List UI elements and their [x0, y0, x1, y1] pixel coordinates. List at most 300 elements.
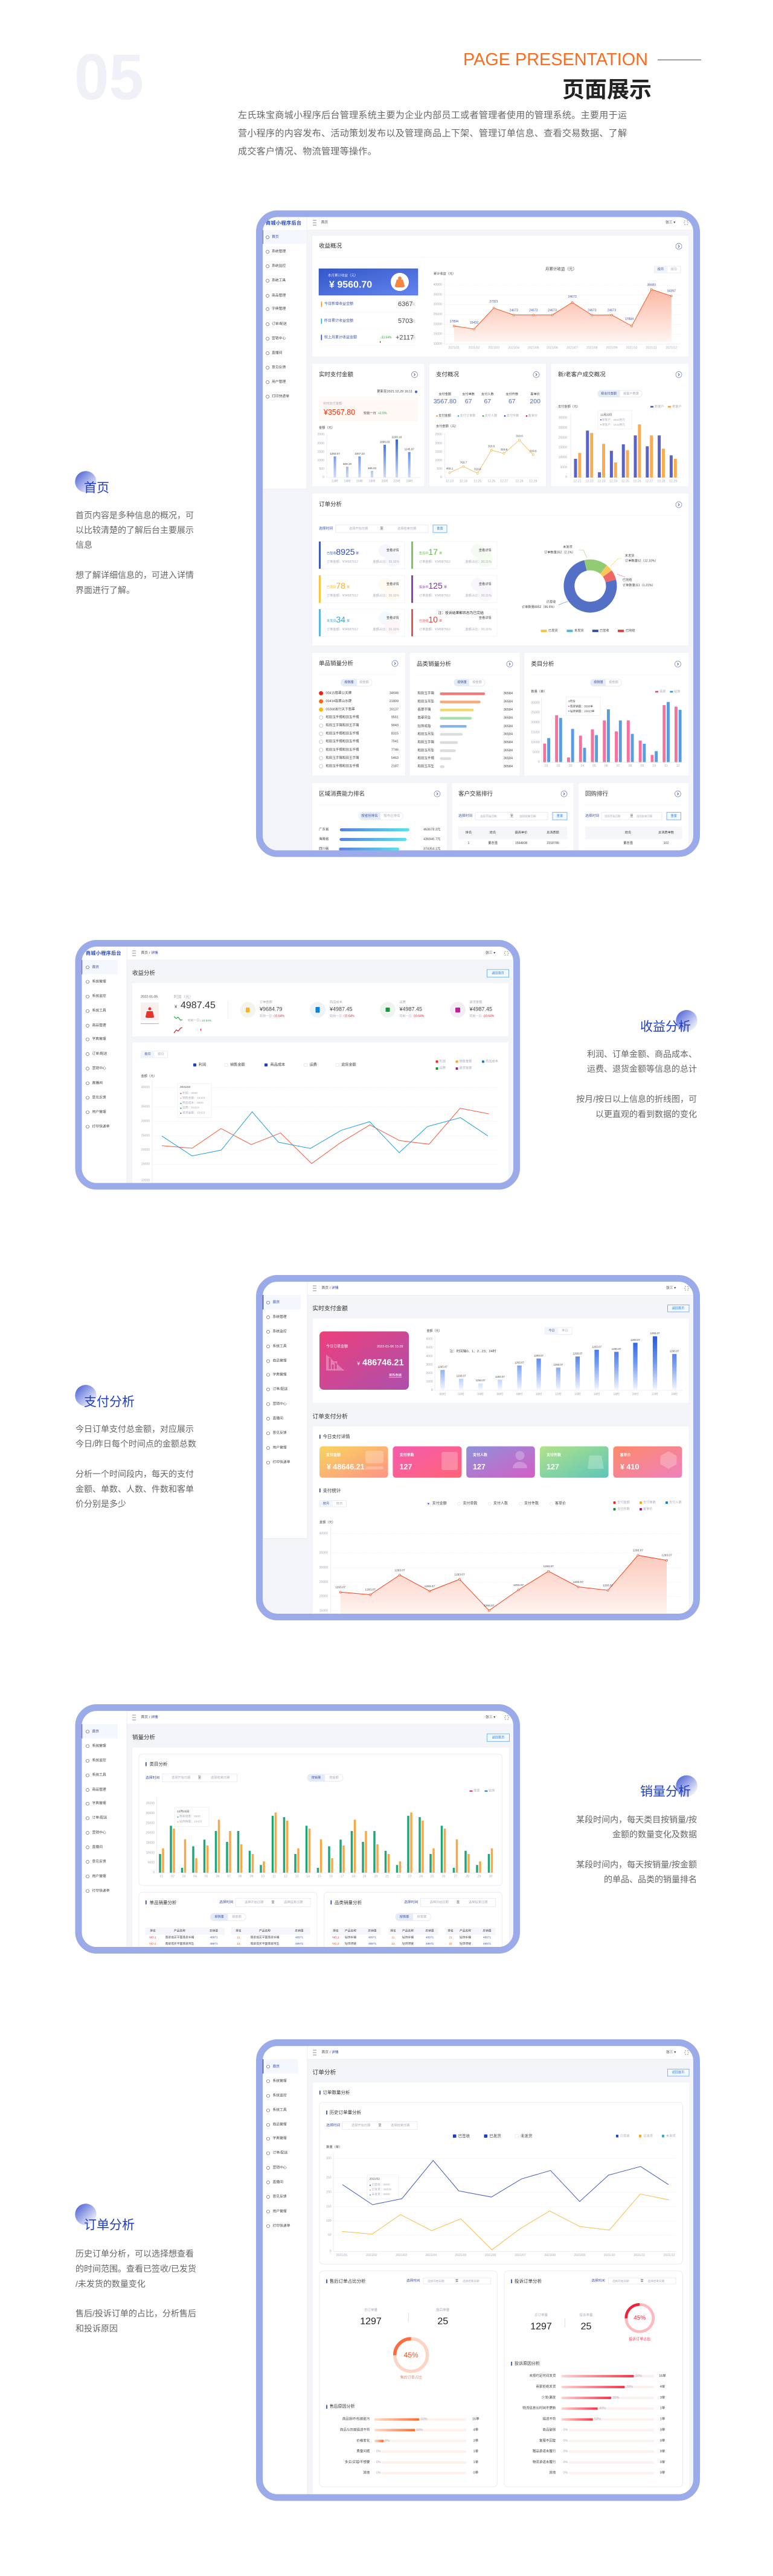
card: category sales: 36584: [504, 692, 513, 695]
box: category sales table: 按金额: [417, 1914, 427, 1919]
page title with back button: 返回首页: [492, 1735, 504, 1740]
sidebar menu: 商品管理: [273, 1358, 287, 1363]
box: single item sales table: NO.2: [149, 1942, 156, 1946]
card: category sales: 36584: [504, 717, 513, 720]
box: historical orders chart: 2021/03: [396, 2254, 407, 2257]
bar list: after-sales reasons: 44%: [416, 2428, 423, 2432]
chart tooltip: 翡翠销量：3500: [179, 1814, 200, 1818]
card: payment overview: 12.26: [487, 479, 495, 483]
box: single item sales table: 排名: [150, 1928, 156, 1933]
box: category analysis chart: 18: [351, 1875, 355, 1879]
sidebar menu: 直播间: [92, 1844, 103, 1849]
side note: 销量分析: 某段时间内，每天按销量/按金额: [576, 1859, 697, 1869]
card: new and old customers: 12.25: [621, 479, 629, 483]
card: realtime payment chart: 02时: [458, 1392, 464, 1396]
box: category analysis chart: 10: [261, 1875, 265, 1879]
line chart: monthly revenue: 2021/11: [646, 347, 657, 350]
bar list: after-sales reasons: 商品损坏/包装脏污: [342, 2417, 370, 2421]
card: payment overview: 支付金额（元）: [436, 424, 458, 429]
card: category sales: 翡翠手镯: [417, 707, 431, 712]
card: payment overview: 客单价: [530, 392, 540, 397]
box: category sales table: 总销量: [425, 1928, 434, 1933]
card: new and old customers: 按客户数量: [623, 391, 639, 395]
card: realtime payment chart: 注：时间轴0、1、2...23、24时: [449, 1349, 496, 1354]
card: single item sales: 21809: [390, 700, 399, 703]
card: payment overview: 12.29: [529, 479, 537, 483]
sidebar menu: 打印快递单: [273, 1460, 290, 1465]
line chart: monthly revenue: [434, 266, 681, 350]
card: realtime payment: ¥3567.80: [323, 408, 355, 417]
card: customer ranking: 排名: [466, 830, 472, 835]
card: payment overview: 支付单数: [462, 392, 475, 397]
card: payment overview: 200: [530, 398, 540, 405]
box: historical orders chart: 2021/07: [515, 2254, 526, 2257]
card: realtime payment chart: 06时: [497, 1392, 503, 1396]
card: realtime payment chart: 6000: [426, 1338, 433, 1341]
card: payment overview: 1000: [435, 459, 442, 462]
sidebar menu: 首页: [273, 1300, 280, 1305]
chart tooltip: 运费：16423: [182, 1105, 199, 1110]
box: category sales table: 产品名称: [345, 1928, 356, 1933]
box: category analysis chart: 08: [239, 1875, 242, 1879]
card: category analysis: 03: [569, 764, 573, 768]
card: profit summary: ¥4987.45: [469, 1006, 492, 1012]
box: historical orders chart: 50: [328, 2234, 332, 2237]
card: realtime payment chart: 1000: [426, 1380, 433, 1384]
order status stat cards: 单: [439, 551, 442, 555]
gradient kpi cards: 支付单数: [400, 1453, 414, 1457]
bar list: after-sales reasons: 质量问题: [356, 2449, 370, 2453]
line chart: monthly revenue: 24673: [588, 309, 597, 313]
card: order analysis: 选择时间: [319, 526, 333, 531]
card: realtime payment: +2.5%: [378, 412, 387, 415]
sidebar menu: 用户管理: [92, 1873, 106, 1878]
box: after-sales orders: 至: [455, 2280, 458, 2283]
bar list: complaint reasons: 物流信息长时间不更新: [522, 2406, 556, 2411]
sidebar menu: [263, 1282, 307, 1538]
card: new and old customers: 支付金额（元）: [558, 404, 580, 409]
card: category sales: 钻饰戒指: [417, 723, 431, 728]
side note: 收益分析: 利润、订单金额、商品成本、: [587, 1049, 697, 1059]
line chart: monthly revenue: 累计收益（元）: [434, 271, 455, 276]
bar list: after-sales reasons: 价格变化: [356, 2438, 370, 2443]
card: realtime payment: 1145.97: [405, 448, 414, 450]
box: category sales table: 钻饰手镯: [345, 1935, 356, 1939]
bar list: complaint reasons: 物流承诺未履行: [533, 2459, 556, 2464]
box: historical orders chart: 已签收: [620, 2133, 630, 2138]
order status stat cards: 金额占比：20.11%: [373, 593, 399, 598]
box: category sales table: 选择结束日期: [469, 1899, 487, 1904]
box: after-sales orders: 售后原因分析: [330, 2403, 355, 2409]
box: category analysis chart: 翡翠: [473, 1788, 480, 1793]
card: profit summary: ¥9684.79: [259, 1006, 283, 1012]
card: realtime payment chart: 24时: [671, 1392, 678, 1396]
sidebar menu: 商品管理: [92, 1787, 106, 1792]
sidebar menu: 字典管理: [273, 2136, 287, 2141]
line chart: monthly revenue: 24673: [509, 309, 518, 313]
box: category analysis chart: 14: [306, 1875, 310, 1879]
order status stat cards: 查看详情: [479, 581, 492, 586]
side note: 收益分析: [576, 1010, 698, 1119]
card: category analysis: 15000: [531, 730, 540, 734]
outer content card: 订单数量分析: [322, 2089, 350, 2095]
line chart: monthly revenue: 2021/06: [547, 347, 558, 350]
order status stat cards: 注：投诉结果都状态为已完结: [438, 610, 484, 615]
card: payment overview: 12.25: [473, 479, 481, 483]
card: payment overview: 319.6: [516, 435, 523, 437]
sidebar menu: 字典管理: [92, 1801, 106, 1806]
card: regional consumption ranking: 海南省: [319, 836, 329, 841]
box: category analysis chart: 27: [454, 1875, 457, 1879]
box: single item sales table: 11: [237, 1935, 240, 1939]
order status stat cards: 订单金额：¥34587612: [327, 559, 358, 564]
box: category analysis chart: 19: [363, 1875, 366, 1879]
card: realtime payment: 508.19: [343, 462, 351, 465]
box: category analysis chart: 29: [478, 1875, 481, 1879]
side note: 首页: 界面进行了解。: [75, 585, 135, 595]
sidebar menu: 商城小程序后台: [266, 220, 301, 226]
card: realtime payment chart: 金额（元）: [426, 1329, 442, 1333]
card: order payment details: 支付人数: [493, 1501, 508, 1506]
card: new and old customers: 新客户: [655, 404, 664, 409]
card: payment overview: 319.6: [501, 448, 508, 451]
bar list: complaint reasons: 未按约定时间发货: [529, 2373, 556, 2378]
chart tooltip: 已发货：16423: [372, 2187, 391, 2191]
box: category sales table: 产品名称: [460, 1928, 471, 1933]
pink total card: [319, 1331, 409, 1390]
progress ring: complaint share: 投诉订单占比: [629, 2337, 650, 2342]
side note: 销量分析: 金额的数量变化及数据: [612, 1829, 697, 1839]
line chart: monthly revenue: 25000: [434, 313, 442, 316]
bar list: after-sales reasons: 3单: [473, 2438, 479, 2443]
card: realtime payment: 金额（元）: [319, 425, 335, 430]
box: single item sales table: 按销量: [214, 1914, 224, 1919]
area line chart: 1293.07: [335, 1585, 346, 1589]
sidebar menu: 营销中心: [92, 1066, 106, 1070]
card: realtime payment: 466.43: [368, 467, 376, 470]
card: revenue overview: [312, 235, 688, 357]
card: repurchase ranking: 姓名: [625, 830, 631, 835]
box: category analysis chart: 03: [182, 1875, 185, 1879]
card: customer ranking: 1: [468, 842, 470, 845]
bar list: complaint reasons: 0%: [563, 2428, 568, 2432]
card: realtime payment chart: 00时: [440, 1392, 446, 1396]
card: repurchase ranking: 102: [664, 842, 669, 845]
card: profit line chart: [132, 1042, 508, 1187]
chart tooltip: 未发货：3500: [372, 2192, 390, 2196]
side note: 销量分析: 某段时间内，每天类目按销量/按: [576, 1815, 697, 1824]
area line chart: 1293.07: [573, 1580, 583, 1584]
card: regional consumption ranking: 463678.3元: [423, 827, 441, 831]
device frame: sales analysis: [79, 1707, 517, 1950]
line chart: monthly revenue: 17894: [625, 318, 633, 321]
card: payment overview: 12.28: [516, 479, 524, 483]
chart tooltip: [178, 1084, 211, 1117]
box: category analysis chart: 12: [284, 1875, 287, 1879]
card: category sales: 36584: [504, 700, 513, 704]
card: category sales: 和田玉吊坠: [417, 699, 434, 704]
bar list: after-sales reasons: 50%: [421, 2418, 428, 2421]
order status stat cards: 售后中: [419, 551, 429, 555]
card: profit summary: 利润（元）: [174, 994, 193, 999]
card: new and old customers: 12.29: [669, 479, 677, 483]
sidebar menu: 首页: [272, 234, 279, 239]
card: category sales: 按销量: [457, 680, 467, 685]
sidebar menu: 订单/配送: [272, 321, 287, 326]
gradient kpi cards: 客单价: [620, 1453, 631, 1457]
box: category analysis chart: 10000: [146, 1851, 155, 1855]
box: category analysis chart: 04: [193, 1875, 197, 1879]
sidebar menu: 系统监控: [272, 263, 286, 268]
bar list: complaint reasons: 3单: [660, 2395, 666, 2400]
bar list: complaint reasons: 0单: [660, 2470, 666, 2475]
card: customer ranking: 客户交易排行: [458, 790, 493, 797]
box: category sales table: 48971: [426, 1942, 434, 1946]
box: single item sales table: 总销量: [295, 1928, 304, 1933]
card: realtime payment chart: 1293.07: [553, 1363, 563, 1366]
progress ring: after-sales share: 售后订单占比: [400, 2375, 422, 2380]
card: realtime payment chart: 08时: [516, 1392, 522, 1396]
card: realtime payment: 实时支付金额：: [323, 401, 345, 406]
line chart: monthly revenue: 2021/01: [448, 347, 460, 350]
card: new and old customers: 10000: [559, 456, 567, 459]
box: historical orders chart: 2021/08: [544, 2254, 556, 2257]
card: new and old customers: 12.22: [586, 479, 594, 483]
card: realtime payment: 1000: [317, 459, 324, 462]
intro paragraph: 成交客户情况、物流管理等操作。: [238, 146, 377, 157]
revenue stat rows: [321, 301, 417, 345]
box: historical orders chart: 历史订单量分析: [330, 2109, 362, 2115]
device frame: home: [260, 214, 697, 854]
line chart: monthly revenue: 2021/07: [566, 347, 578, 350]
progress ring: complaint share: 45%: [633, 2315, 646, 2322]
top header bar: 首页 / 详情: [321, 1285, 339, 1290]
side note: 收益分析: 以更直观的看到数据的变化: [595, 1109, 697, 1119]
chart tooltip: 商品成本：3500: [182, 1101, 204, 1105]
area line chart: 1293.07: [603, 1584, 614, 1588]
chart tooltip: [598, 411, 632, 429]
box: category sales table: [324, 1892, 502, 1958]
card: regional consumption ranking: 按市区排名: [383, 813, 400, 818]
top header bar: 首页: [321, 220, 328, 225]
side note: 收益分析: 运费、退货金额等信息的总计: [587, 1064, 697, 1074]
donut chart: order status: 订单数量8952（96.6%）: [522, 604, 556, 609]
box: category analysis chart: 23: [408, 1875, 411, 1879]
box: category sales table: 选择开始日期: [430, 1899, 449, 1904]
bar list: complaint reasons: 商家拒绝发货: [536, 2384, 556, 2389]
sidebar menu: 意见反馈: [92, 1859, 106, 1864]
revenue stat rows: +2117: [396, 334, 414, 342]
bar list: complaint reasons: 10%: [635, 2374, 642, 2378]
card: realtime payment: 1007.23: [354, 452, 365, 455]
card: realtime payment: 1500: [317, 450, 324, 454]
card: payment overview: 500: [437, 467, 442, 471]
box: complaint orders: 投诉订单分析: [515, 2278, 542, 2284]
line chart: monthly revenue: 2021/09: [606, 347, 617, 350]
card: category analysis: 01: [545, 764, 548, 768]
bar list: complaint reasons: 30%: [612, 2396, 620, 2400]
box: category analysis chart: 07: [227, 1875, 231, 1879]
box: historical orders chart: 2021/10: [604, 2254, 615, 2257]
box: category sales table: 按销量: [400, 1914, 409, 1919]
box: single item sales table: 翡翠或买平面翡翠吊坠: [165, 1942, 194, 1946]
box: category analysis chart: 选择开始日期: [172, 1775, 190, 1780]
box: single item sales table: 单品销量分析: [150, 1899, 177, 1905]
card: regional consumption ranking: [312, 782, 447, 855]
box: historical orders chart: 0: [330, 2249, 332, 2253]
box: single item sales table: [139, 1892, 317, 1958]
box: after-sales orders: 1297: [360, 2316, 382, 2327]
box: after-sales orders: 售后单量: [436, 2307, 450, 2312]
card: realtime payment: 13时: [332, 478, 338, 483]
sidebar menu: 系统工具: [272, 278, 286, 283]
revenue stat rows: 元: [412, 336, 415, 340]
sidebar menu: 直播间: [273, 2179, 283, 2184]
box: complaint orders: [504, 2271, 682, 2487]
donut chart: order status: 已完结: [626, 628, 635, 633]
page title with back button: [312, 2068, 689, 2076]
card: realtime payment: 较前一日: [364, 411, 376, 415]
card: payment overview: 319.6: [530, 449, 537, 453]
sidebar menu: 字典管理: [272, 306, 286, 311]
sidebar menu: 系统监控: [92, 994, 106, 999]
bar list: complaint reasons: 4单: [660, 2384, 666, 2389]
box: category sales table: 排名: [447, 1928, 454, 1933]
card: regional consumption ranking: 436846.7元: [423, 837, 441, 841]
bar list: complaint reasons: 1单: [660, 2417, 666, 2421]
card: payment overview: 支付订单数: [460, 413, 476, 418]
bar list: after-sales reasons: 0%: [376, 2472, 381, 2475]
sidebar menu: 意见反馈: [273, 2194, 287, 2199]
box: category analysis chart: 15000: [146, 1841, 155, 1845]
box: category sales table: 钻饰项链: [345, 1942, 356, 1946]
card: category analysis: 翡翠: [659, 689, 666, 694]
line chart: monthly revenue: 按日: [671, 267, 677, 272]
card: profit line chart: 运费: [440, 1066, 446, 1070]
card: order payment details: 按月: [323, 1501, 329, 1506]
card: customer ranking: 2318786: [547, 842, 559, 845]
card: profit summary: 订单金额: [260, 1000, 273, 1005]
page title with back button: 销量分析: [132, 1734, 156, 1741]
box: single item sales table: 按金额: [232, 1914, 242, 1919]
card: category analysis: 11: [664, 764, 668, 768]
blue balance card: [319, 269, 418, 295]
donut chart: order status: 已签收: [600, 628, 609, 633]
card: profit line chart: 25000: [141, 1134, 150, 1137]
sidebar menu: 系统监控: [92, 1758, 106, 1763]
card: order payment details: 40000: [319, 1532, 328, 1535]
card: category analysis: 20000: [531, 721, 540, 724]
box: category sales table: 12: [391, 1942, 395, 1946]
card: customer ranking: 总消费额: [547, 830, 560, 835]
bar list: complaint reasons: [522, 2373, 666, 2475]
sidebar menu: 系统监控: [273, 2093, 287, 2098]
bar list: complaint reasons: 50%: [594, 2418, 601, 2421]
card: profit line chart: 销售金额: [459, 1058, 472, 1063]
sidebar menu: 首页: [273, 2063, 280, 2068]
card: profit line chart: 利润: [199, 1063, 206, 1067]
area line chart: 1293.07: [513, 1584, 524, 1587]
card: realtime payment chart: 1293.07: [515, 1361, 524, 1364]
panel: home screen mockup: [262, 217, 694, 855]
card: repurchase ranking: [578, 782, 689, 855]
panel: payment analysis mockup: [263, 1282, 694, 1619]
order status stat cards: 已签收: [327, 551, 336, 555]
card: payment overview: 2500: [435, 433, 442, 436]
box: single item sales table: 产品名称: [259, 1928, 271, 1933]
intro paragraph: [238, 110, 627, 157]
card: payment overview: 763.7: [460, 461, 467, 464]
top header bar: [307, 2046, 694, 2059]
sidebar menu: [262, 217, 307, 489]
device frame: payment analysis: [260, 1279, 697, 1617]
card: realtime payment chart: 22时: [652, 1392, 658, 1396]
card: profit line chart: 40000: [141, 1085, 150, 1089]
box: category analysis chart: 按金额: [329, 1775, 339, 1780]
box: after-sales orders: 选择时间: [406, 2278, 420, 2283]
box: category sales table: NO.1: [332, 1935, 339, 1939]
card: order payment details: 金额（元）: [319, 1520, 335, 1524]
sidebar menu: 打印快递单: [272, 394, 289, 398]
sidebar menu: [82, 946, 127, 1183]
card: single item sales: 和田玉手镯和田玉手镯: [326, 739, 359, 744]
box: historical orders chart: 200: [326, 2191, 332, 2194]
card: payment overview: 支付概况: [436, 371, 460, 378]
order status stat cards: 查看详情: [479, 615, 492, 620]
top header bar: 首页 / 详情: [141, 950, 158, 955]
sidebar menu: 打印快递单: [92, 1123, 110, 1128]
card: payment overview: 319.6: [488, 444, 495, 448]
box: category analysis chart: 13: [295, 1875, 298, 1879]
box: historical orders chart: 100: [326, 2219, 332, 2223]
area line chart: 1293.07: [544, 1565, 554, 1568]
card: realtime payment: 2238.16: [392, 436, 402, 438]
box: category analysis chart: 选择结束日期: [211, 1775, 229, 1780]
bar list: after-sales reasons: 多买/买错/不想要: [345, 2459, 370, 2464]
revenue stat rows: 昨日累计收益金额: [324, 318, 353, 323]
side note: 支付分析: 今日订单支付总金额，对应展示: [75, 1424, 194, 1434]
revenue stat rows: 6367: [398, 301, 412, 308]
card: repurchase ranking: 董念强: [623, 840, 633, 845]
box: category analysis chart: 05: [205, 1875, 208, 1879]
revenue stat rows: ↓33.64%: [380, 336, 392, 339]
chart tooltip: 销售金额：16423: [182, 1096, 205, 1100]
bar list: after-sales reasons: 6%: [385, 2439, 390, 2443]
card: category analysis: 05: [592, 764, 596, 768]
order status stat cards: 125: [428, 581, 443, 590]
box: historical orders chart: 已发货: [489, 2133, 501, 2138]
bar list: complaint reasons: 0%: [563, 2439, 568, 2443]
box: after-sales orders: 选择结束日期: [463, 2279, 480, 2283]
sidebar menu: 字典管理: [273, 1372, 287, 1376]
sidebar menu: 系统管理: [92, 979, 106, 983]
device frame: order analysis: [260, 2043, 697, 2498]
side note: 支付分析: 金额、单数、人数、件数和客单: [75, 1484, 194, 1494]
box: historical orders chart: 数量（单）: [326, 2144, 342, 2149]
card: profit line chart: 商品成本: [271, 1063, 285, 1067]
top header bar: [127, 946, 513, 960]
sidebar menu: 打印快递单: [92, 1888, 110, 1893]
line chart: monthly revenue: 17894: [450, 320, 458, 324]
bar list: complaint reasons: 16单: [659, 2373, 666, 2378]
order status stat cards: 查看详情: [386, 548, 399, 552]
card: realtime payment: 14时: [344, 478, 350, 483]
blue balance card: 本月累计收益（元）: [328, 273, 358, 278]
card: category sales: 36584: [504, 749, 513, 752]
sidebar menu: 商城小程序后台: [86, 950, 121, 956]
side note: 首页: 首页: [84, 481, 109, 495]
side note: 订单分析: 订单分析: [84, 2218, 135, 2232]
